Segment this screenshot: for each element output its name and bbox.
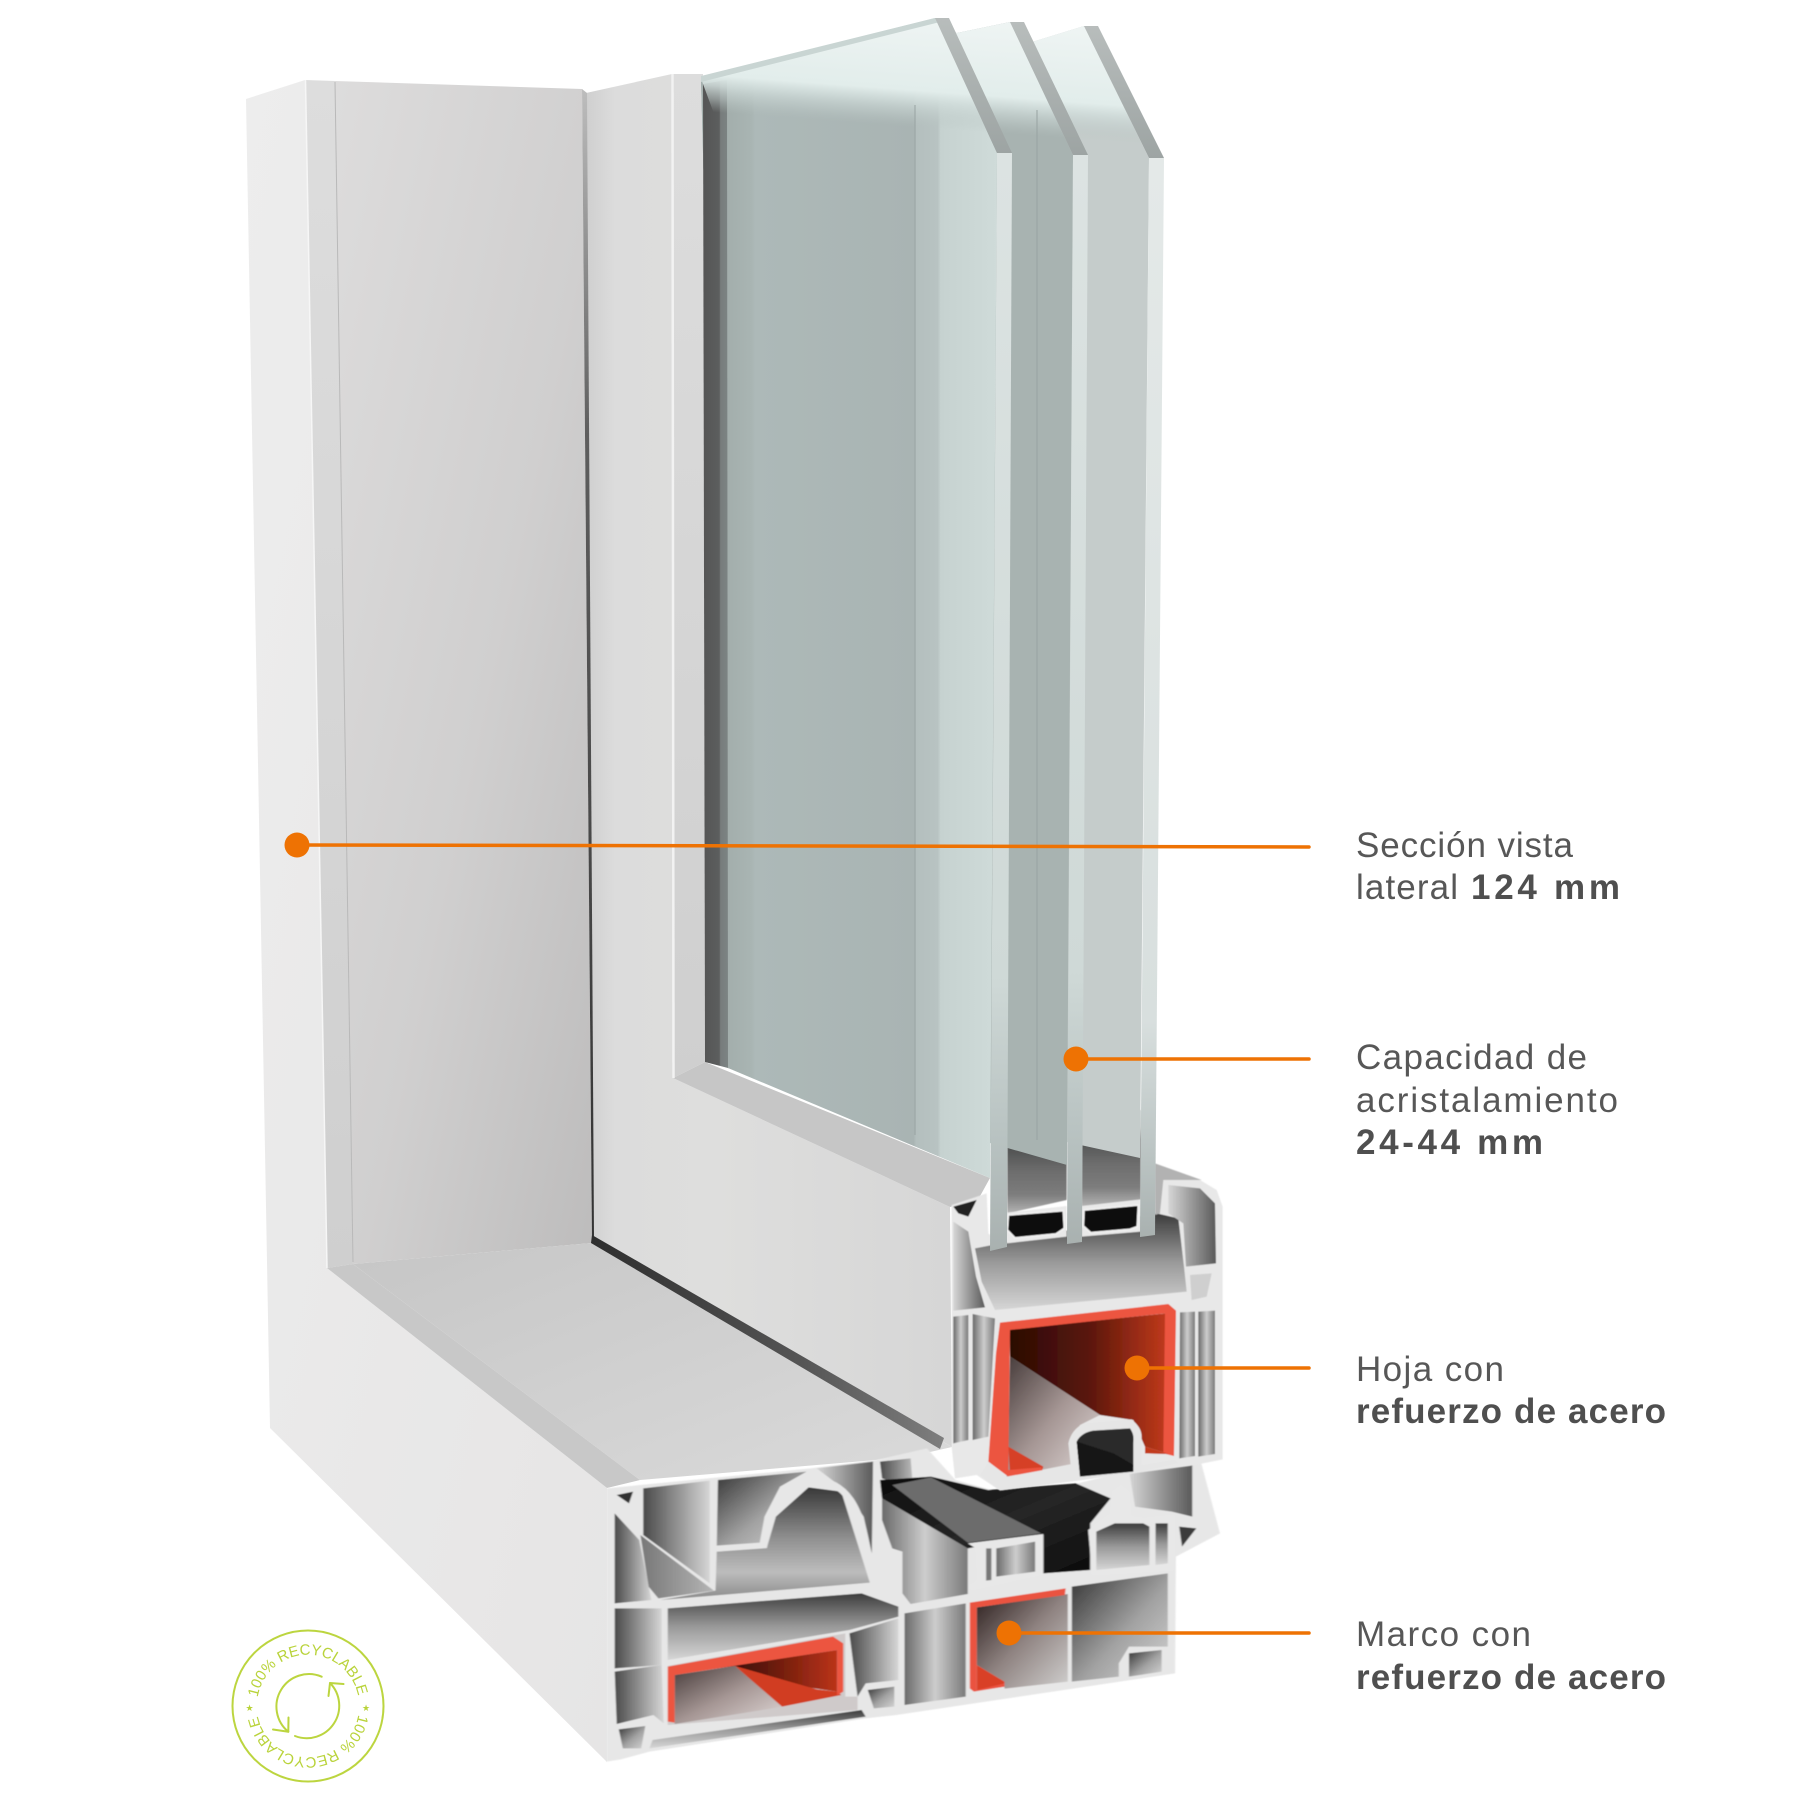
badge: 100% recyclable: 100% RECYCLABLE	[248, 1716, 368, 1768]
callout: glazing capacity	[1064, 1046, 1309, 1072]
label: glazing capacity: Capacidad de	[1356, 1038, 1587, 1077]
label: frame steel: Marco con	[1356, 1615, 1531, 1654]
label: sash steel: refuerzo de acero	[1356, 1392, 1666, 1431]
frame profile body	[607, 1448, 1220, 1762]
frame steel reinforcement lower left	[668, 1633, 858, 1725]
panel: outer frame	[246, 80, 607, 1762]
window cutaway illustration	[246, 18, 1223, 1762]
frame chambers upper row	[615, 1458, 921, 1603]
frame steel reinforcement lower right	[970, 1588, 1068, 1692]
panel: sash face	[582, 74, 990, 1449]
badge: 100% recyclable: ★	[362, 1704, 370, 1714]
callout: side view section	[284, 832, 1309, 858]
label: side view section: lateral	[1356, 868, 1458, 907]
glazing floor between panes	[1007, 1110, 1202, 1243]
label: side view section: Sección vista	[1356, 826, 1574, 865]
label: glazing capacity: 24-44 mm	[1356, 1123, 1543, 1162]
callout: sash steel	[1124, 1356, 1309, 1380]
label: sash steel	[1356, 1350, 1666, 1431]
glass rebate shadow	[703, 80, 728, 1068]
glass pane 1	[701, 18, 997, 1178]
frame cross-section	[607, 1448, 1220, 1762]
panel: triple glazing	[701, 18, 1164, 1251]
badge: 100% recyclable: 100% RECYCLABLE	[248, 1644, 368, 1696]
glass pane 2	[701, 22, 1073, 1165]
badge: 100% recyclable: ★	[245, 1704, 254, 1714]
sash inner hump	[980, 1419, 1178, 1491]
callout: frame steel	[996, 1620, 1309, 1646]
sash profile body	[952, 1178, 1223, 1491]
sash cross-section	[952, 1110, 1223, 1491]
label: frame steel: refuerzo de acero	[1356, 1658, 1666, 1697]
glass pane edges	[915, 18, 1164, 1251]
sash steel reinforcement	[988, 1304, 1176, 1477]
frame central gasket and inner profile	[880, 1463, 1196, 1604]
sash chambers	[953, 1185, 1216, 1458]
glazing spacers	[1007, 1205, 1138, 1238]
label: side view section	[1356, 826, 1620, 907]
glass upper reflections	[701, 18, 1149, 158]
label: glazing capacity	[1356, 1038, 1618, 1162]
label: glazing capacity: acristalamiento	[1356, 1081, 1618, 1120]
label: sash steel: Hoja con	[1356, 1350, 1504, 1389]
label: frame steel	[1356, 1615, 1666, 1697]
label: side view section: 124 mm	[1471, 868, 1620, 907]
badge: 100% recyclable	[232, 1630, 384, 1782]
panel: frame sill	[327, 1243, 952, 1488]
glass pane 3	[701, 26, 1149, 1158]
frame chambers lower row	[615, 1573, 1168, 1748]
icon: recycling arrows	[273, 1674, 344, 1738]
frame arch	[717, 1480, 868, 1557]
